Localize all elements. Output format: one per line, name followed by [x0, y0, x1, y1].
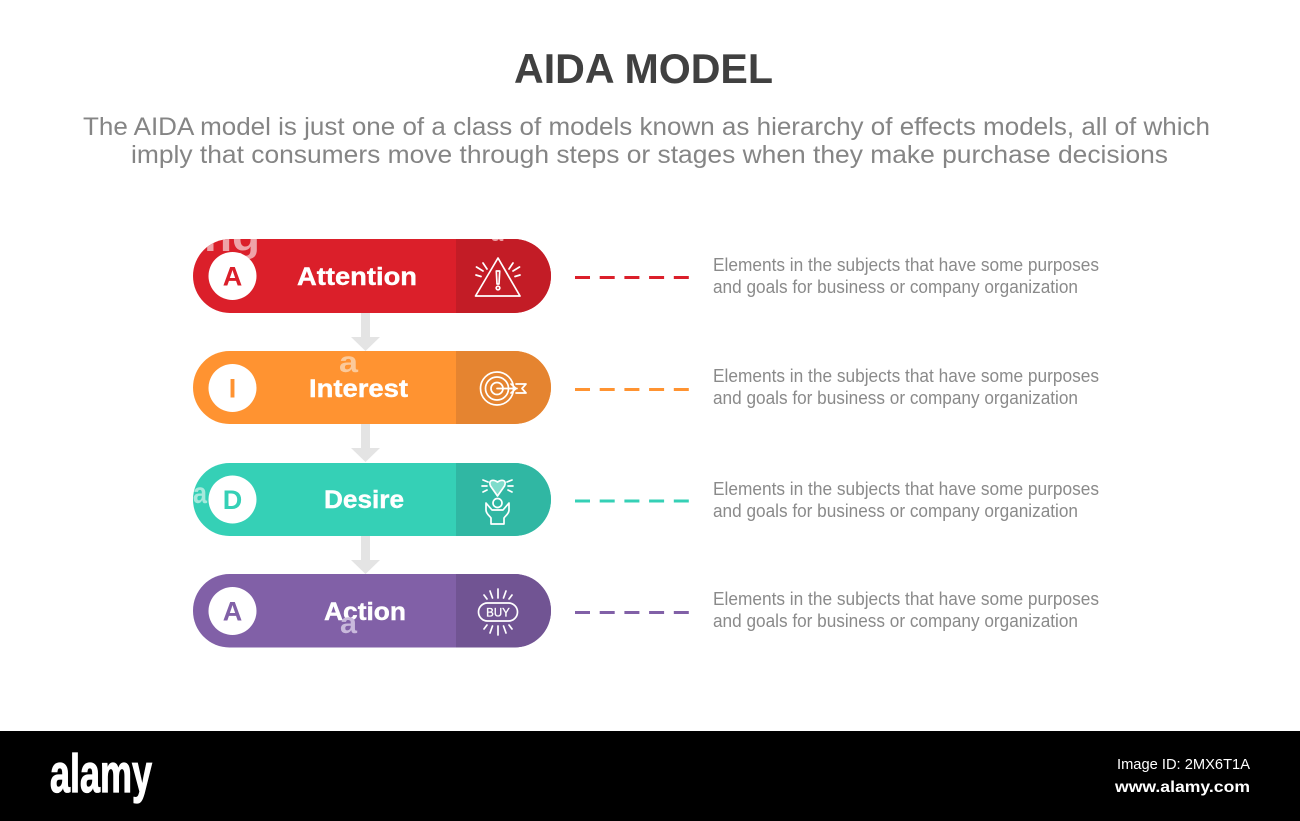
icon: target with arrow	[480, 372, 526, 405]
text block: attention description: Elements in the subjects that have some purposes	[713, 255, 1099, 275]
panel: desire pill: D	[223, 485, 242, 515]
panel: attention pill: Attention	[297, 263, 417, 291]
panel: action pill: Action	[324, 598, 406, 626]
icon: warning triangle	[476, 258, 520, 296]
footer bar: stock watermark: www.alamy.com	[1114, 779, 1250, 796]
footer bar: stock watermark: Image ID: 2MX6T1A	[1117, 756, 1250, 773]
panel: action pill: a	[340, 607, 357, 640]
subtitle text	[83, 113, 1210, 169]
subtitle text: imply that consumers move through steps or stages when they make purchase decisions	[131, 141, 1168, 169]
text block: interest description: and goals for business or company organization	[713, 388, 1078, 408]
footer bar: stock watermark	[0, 731, 1300, 821]
panel: interest pill: I	[229, 374, 236, 404]
dashed connector: action	[575, 611, 689, 614]
text block: interest description: Elements in the subjects that have some purposes	[713, 366, 1099, 386]
dashed connector: desire	[575, 500, 689, 502]
panel: interest pill	[193, 346, 551, 424]
arrow: desire to action	[351, 536, 380, 574]
panel: attention pill: A	[223, 262, 242, 292]
text block: action description: Elements in the subjects that have some purposes	[713, 589, 1099, 609]
panel: desire pill	[193, 463, 551, 536]
text block: desire description: Elements in the subjects that have some purposes	[713, 479, 1099, 499]
text block: attention description	[713, 255, 1099, 297]
icon: hands holding heart	[482, 480, 513, 524]
text block: action description	[713, 589, 1099, 631]
panel: interest pill: a	[339, 346, 358, 379]
panel: desire pill: Desire	[324, 486, 404, 514]
subtitle text: The AIDA model is just one of a class of models known as hierarchy of effects models, all of which	[83, 113, 1210, 141]
text block: interest description	[713, 366, 1099, 408]
arrow: interest to desire	[351, 424, 380, 462]
dashed connector: attention	[575, 276, 689, 279]
panel: interest pill: Interest	[309, 375, 409, 403]
panel: attention pill: a	[491, 221, 504, 246]
title: AIDA MODEL	[514, 45, 773, 92]
arrow: attention to interest	[351, 313, 380, 351]
panel: action pill	[193, 574, 551, 648]
text block: attention description: and goals for business or company organization	[713, 277, 1078, 297]
panel: attention pill	[193, 239, 551, 313]
dashed connector: interest	[575, 388, 689, 391]
text block: desire description	[713, 479, 1099, 521]
icon: buy button with rays	[478, 589, 518, 635]
text block: action description: and goals for business or company organization	[713, 611, 1078, 631]
panel: action pill: A	[223, 596, 242, 626]
panel: attention pill: ng	[204, 213, 260, 260]
icon: buy button with rays: BUY	[486, 608, 510, 620]
text block: desire description: and goals for business or company organization	[713, 501, 1078, 521]
panel: desire pill: a	[193, 477, 207, 510]
footer bar: stock watermark: alamy	[50, 744, 152, 804]
